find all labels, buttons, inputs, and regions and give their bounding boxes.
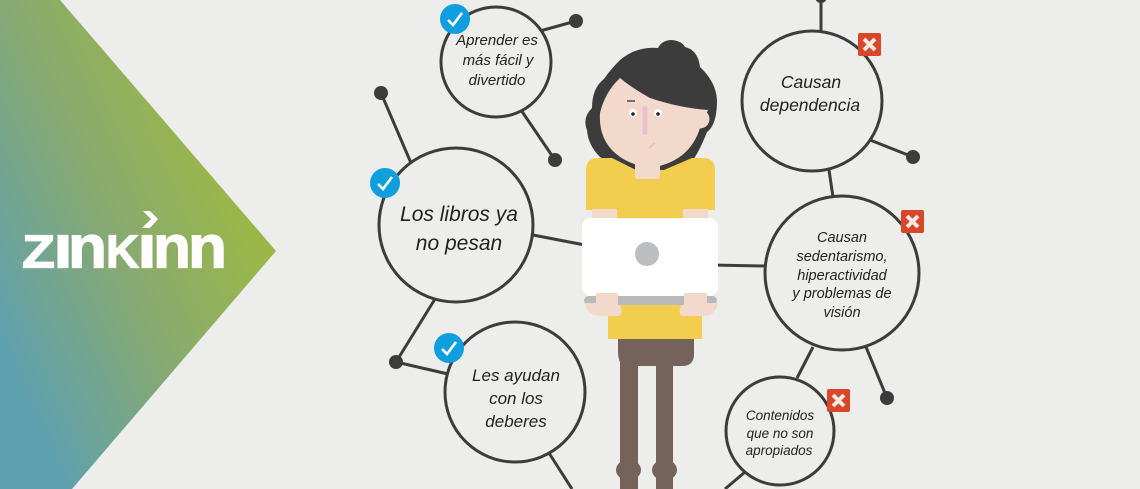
bubble: Causan dependencia: dependencia <box>760 95 860 115</box>
face <box>600 78 708 167</box>
bubble: Los libros ya no pesan: Los libros ya <box>400 203 518 226</box>
logo: zinkinn <box>22 211 227 280</box>
bubble: Causan sedentarismo, hiperactividad y problemas de visión: visión <box>823 305 861 321</box>
icon: cross sedentarismo <box>901 210 924 233</box>
laptop logo <box>635 242 659 266</box>
bubble: Contenidos que no son apropiados: que no son <box>747 426 813 441</box>
logo: zinkinn: n <box>188 214 227 280</box>
bubble: Aprender es más fácil y divertido <box>441 7 551 117</box>
logo: zinkinn: Z <box>22 226 55 278</box>
connector lines and end dots <box>374 0 920 489</box>
icon: cross contenidos <box>827 389 850 412</box>
lower shirt <box>608 300 702 339</box>
icon: logo chevron <box>142 211 158 228</box>
character: girl with laptop <box>582 40 718 489</box>
gradient arrow panel <box>0 0 276 489</box>
icon: check Les ayudan <box>434 333 464 363</box>
bubble: Contenidos que no son apropiados <box>726 377 834 485</box>
logo: zinkinn: I <box>54 226 72 278</box>
bubble: Aprender es más fácil y divertido: Aprender es <box>455 32 538 49</box>
logo: zinkinn: n <box>153 214 191 280</box>
bubble: Los libros ya no pesan: no pesan <box>416 232 502 255</box>
hair <box>585 40 717 172</box>
bubble: Aprender es más fácil y divertido: más fácil y <box>463 52 535 69</box>
laptop base <box>584 296 717 305</box>
icon: cross Causan dependencia <box>858 33 881 56</box>
legs <box>616 339 694 489</box>
laptop lid <box>582 218 718 296</box>
bubble: Causan sedentarismo, hiperactividad y problemas de visión: y problemas de <box>791 286 892 302</box>
bubble: Causan dependencia: Causan <box>781 72 841 92</box>
bubble: Causan dependencia <box>742 31 882 171</box>
bubble: Los libros ya no pesan <box>379 148 533 302</box>
bubble: Aprender es más fácil y divertido: divertido <box>469 72 525 89</box>
arms <box>592 209 617 218</box>
eyes, brow, nose, mouth <box>627 101 662 148</box>
neck <box>635 160 660 179</box>
icon: check Aprender <box>440 4 470 34</box>
logo: zinkinn: n <box>68 214 107 280</box>
bubble: Causan sedentarismo, hiperactividad y problemas de visión: sedentarismo, <box>796 249 888 265</box>
shirt <box>586 158 715 218</box>
logo: zinkinn: I <box>138 226 156 278</box>
ear <box>690 110 710 128</box>
logo: zinkinn: K <box>106 226 139 278</box>
bubble: Causan sedentarismo, hiperactividad y problemas de visión: hiperactividad <box>797 268 888 284</box>
bubble: Les ayudan con los deberes: Les ayudan <box>472 366 560 385</box>
bubble: Causan sedentarismo, hiperactividad y problemas de visión <box>765 196 919 350</box>
bubble: Les ayudan con los deberes: deberes <box>485 412 547 431</box>
bubble: Causan sedentarismo, hiperactividad y problemas de visión: Causan <box>817 230 867 246</box>
icon: check Los libros <box>370 168 400 198</box>
bubble: Les ayudan con los deberes <box>445 322 585 462</box>
bubble: Les ayudan con los deberes: con los <box>489 389 543 408</box>
hands <box>585 293 622 316</box>
bubble: Contenidos que no son apropiados: apropiados <box>746 443 813 458</box>
bubble: Contenidos que no son apropiados: Contenidos <box>746 408 814 423</box>
